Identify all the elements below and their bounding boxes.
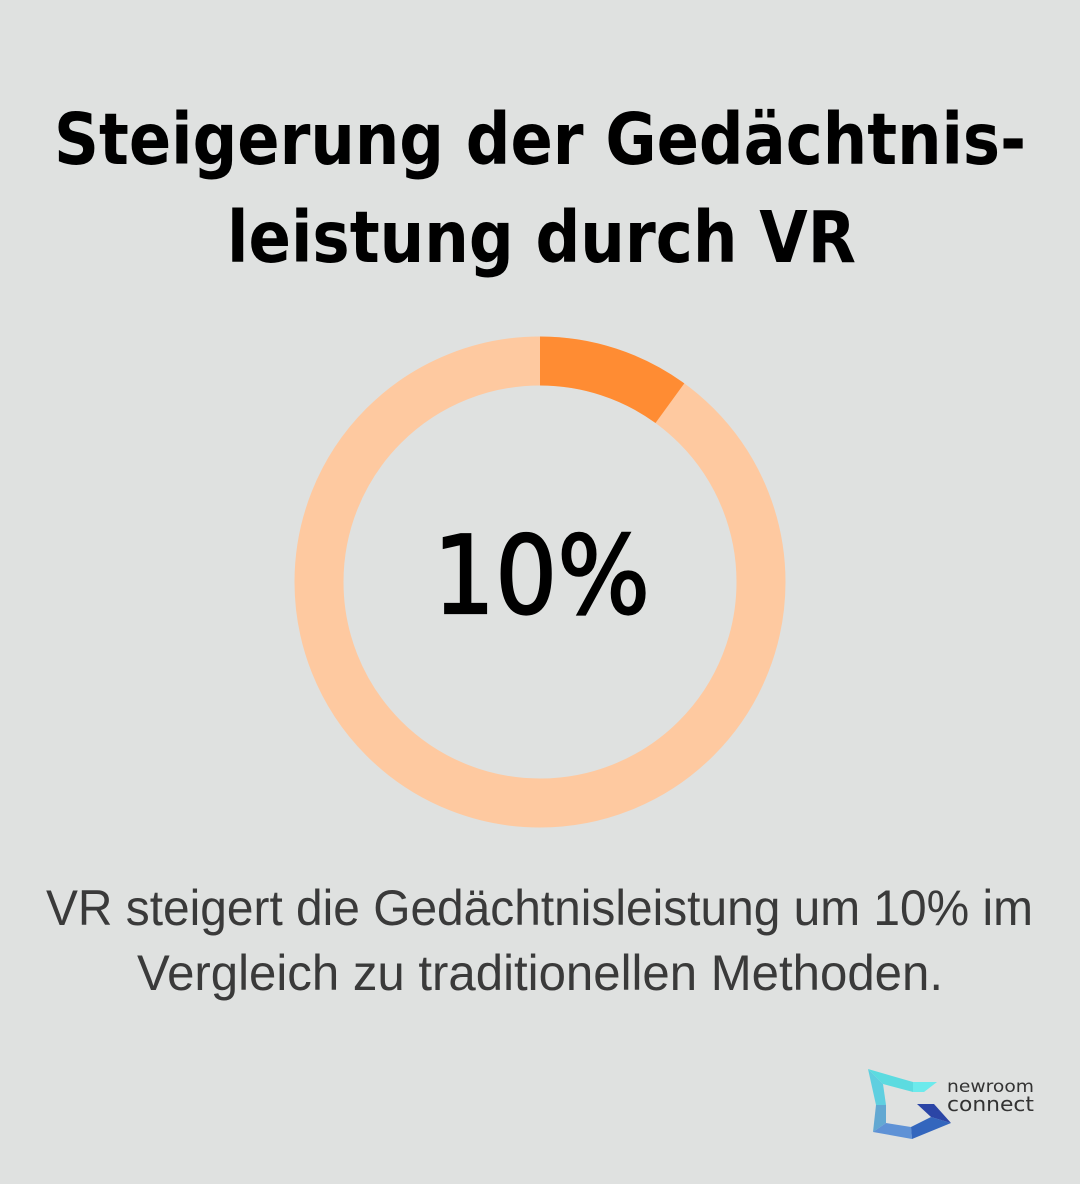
logo wordmark: connect bbox=[947, 1092, 1034, 1116]
description bbox=[46, 880, 1033, 1001]
logo bbox=[868, 1069, 1034, 1139]
title bbox=[54, 98, 1026, 279]
title: leistung durch VR bbox=[227, 196, 856, 279]
donut chart bbox=[319, 336, 761, 803]
description: Vergleich zu traditionellen Methoden. bbox=[137, 945, 943, 1001]
description: VR steigert die Gedächtnisleistung um 10% im bbox=[46, 880, 1033, 936]
center value: 10% bbox=[433, 514, 650, 639]
donut highlighted segment: 10% bbox=[540, 336, 684, 423]
logo wordmark: newroom bbox=[947, 1077, 1034, 1097]
donut track bbox=[319, 361, 761, 803]
logo wordmark bbox=[947, 1077, 1034, 1116]
logo icon bbox=[868, 1069, 951, 1139]
